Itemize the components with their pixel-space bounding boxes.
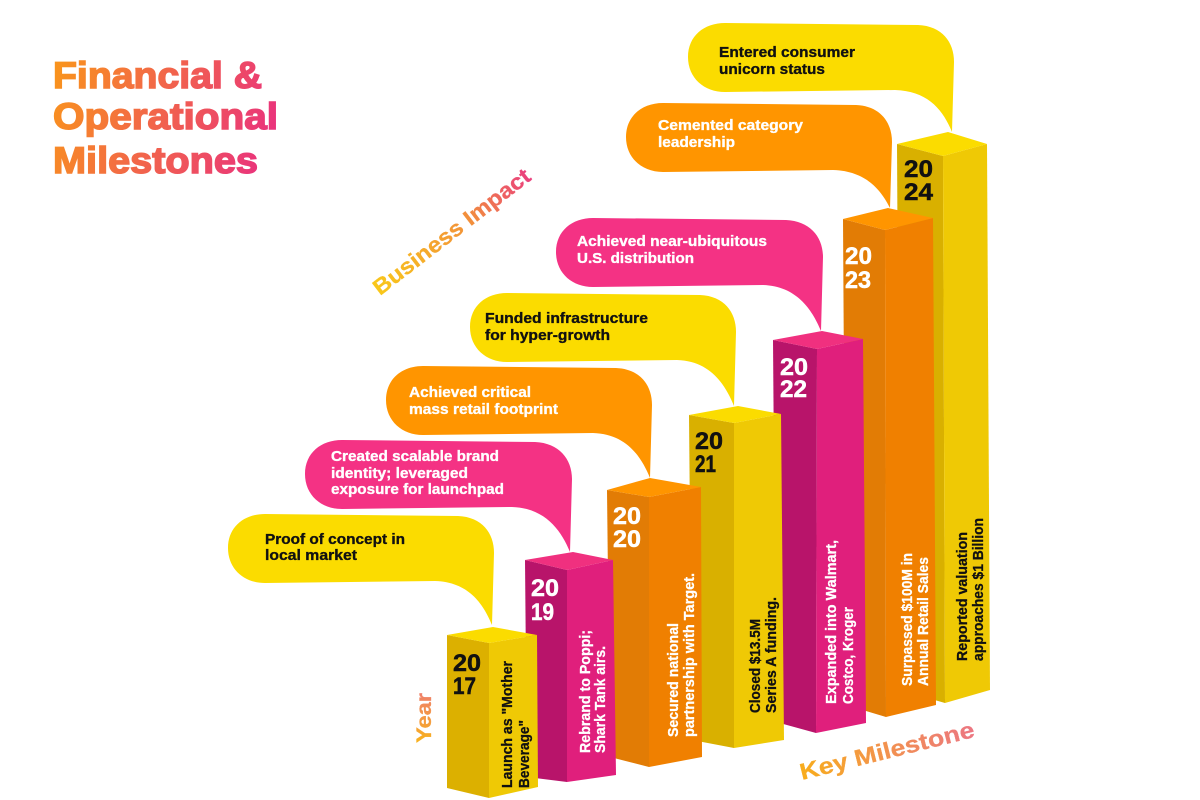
callout: 2020 business impact: Achieved critical [409, 384, 531, 401]
bar: 2022: 22 [780, 376, 807, 403]
title: Milestones [53, 140, 258, 181]
callout: 2024 business impact: Entered consumer [719, 44, 855, 61]
callout: 2023 business impact: leadership [658, 134, 735, 151]
callout: 2019 business impact [305, 440, 572, 552]
callout: 2021 business impact: Funded infrastructure [485, 310, 648, 327]
bar: 2024: Reported valuation [955, 532, 971, 661]
callout: 2022 business impact [556, 218, 823, 331]
callout: 2023 business impact: Cemented category [658, 117, 804, 134]
axis label: Business Impact: Business Impact [368, 163, 536, 300]
axis label: Key Milestone: Key Milestone [797, 716, 977, 785]
bar: 2017: Launch as "Mother [500, 661, 516, 788]
title: Operational [53, 96, 278, 137]
bar: 2017: 20 [453, 650, 481, 677]
callout: 2024 business impact [688, 23, 954, 132]
bar: 2019: 20 [531, 575, 559, 602]
callout: 2023 business impact [626, 103, 892, 208]
callout: 2019 business impact: Created scalable brand [331, 448, 499, 465]
title: Financial & [53, 55, 262, 96]
bar: 2023 [843, 208, 936, 717]
bar: 2021: 21 [695, 451, 716, 478]
bar: 2020 [607, 478, 702, 767]
bar: 2020: 20 [613, 526, 641, 553]
bar: 2017: Beverage" [517, 720, 533, 788]
bar: 2024: 24 [904, 179, 934, 206]
bar: 2022 [773, 331, 866, 733]
callout: 2017 business impact: local market [265, 547, 357, 564]
callout: 2020 business impact [386, 366, 652, 478]
callout: 2024 business impact: unicorn status [719, 61, 825, 78]
bar: 2023: Annual Retail Sales [916, 557, 932, 686]
callout: 2017 business impact: Proof of concept in [265, 531, 405, 548]
bar: 2021: Series A funding. [764, 597, 780, 713]
callout: 2021 business impact [470, 293, 736, 406]
bar: 2022: Expanded into Walmart, [824, 540, 840, 704]
title [53, 55, 278, 181]
callout: 2020 business impact: mass retail footprint [409, 401, 558, 418]
bar: 2017 [447, 627, 538, 798]
bar: 2023: 20 [845, 243, 872, 270]
bar: 2019: 19 [531, 599, 554, 626]
callout: 2022 business impact: Achieved near-ubiquitous [577, 233, 767, 250]
callout: 2022 business impact: U.S. distribution [577, 250, 694, 267]
callout: 2021 business impact: for hyper-growth [485, 327, 610, 344]
bar: 2024 [897, 132, 990, 703]
bar: 2022: 20 [780, 354, 808, 381]
bar: 2019: Rebrand to Poppi; [578, 630, 594, 753]
bar: 2019 [525, 552, 616, 782]
bar: 2020: 20 [613, 503, 641, 530]
bar: 2021: 20 [695, 428, 723, 455]
callout: 2019 business impact: exposure for launchpad [331, 481, 504, 498]
bar: 2024: approaches $1 Billion [971, 518, 987, 661]
bar: 2023: Surpassed $100M in [900, 553, 916, 686]
axis label: Year: Year [413, 693, 436, 743]
bar: 2019: Shark Tank airs. [593, 646, 609, 753]
bar: 2023: 23 [845, 267, 871, 294]
bar: 2020: partnership with Target. [682, 573, 698, 737]
callout: 2019 business impact: identity; leveraged [331, 465, 468, 482]
bar: 2020: Secured national [666, 623, 682, 737]
bar: 2021: Closed $13.5M [748, 619, 764, 713]
bar: 2022: Costco, Kroger [841, 607, 857, 704]
bar: 2021 [689, 406, 784, 748]
callout: 2017 business impact [228, 514, 494, 625]
bar: 2024: 20 [904, 156, 933, 183]
bar: 2017: 17 [453, 673, 476, 700]
